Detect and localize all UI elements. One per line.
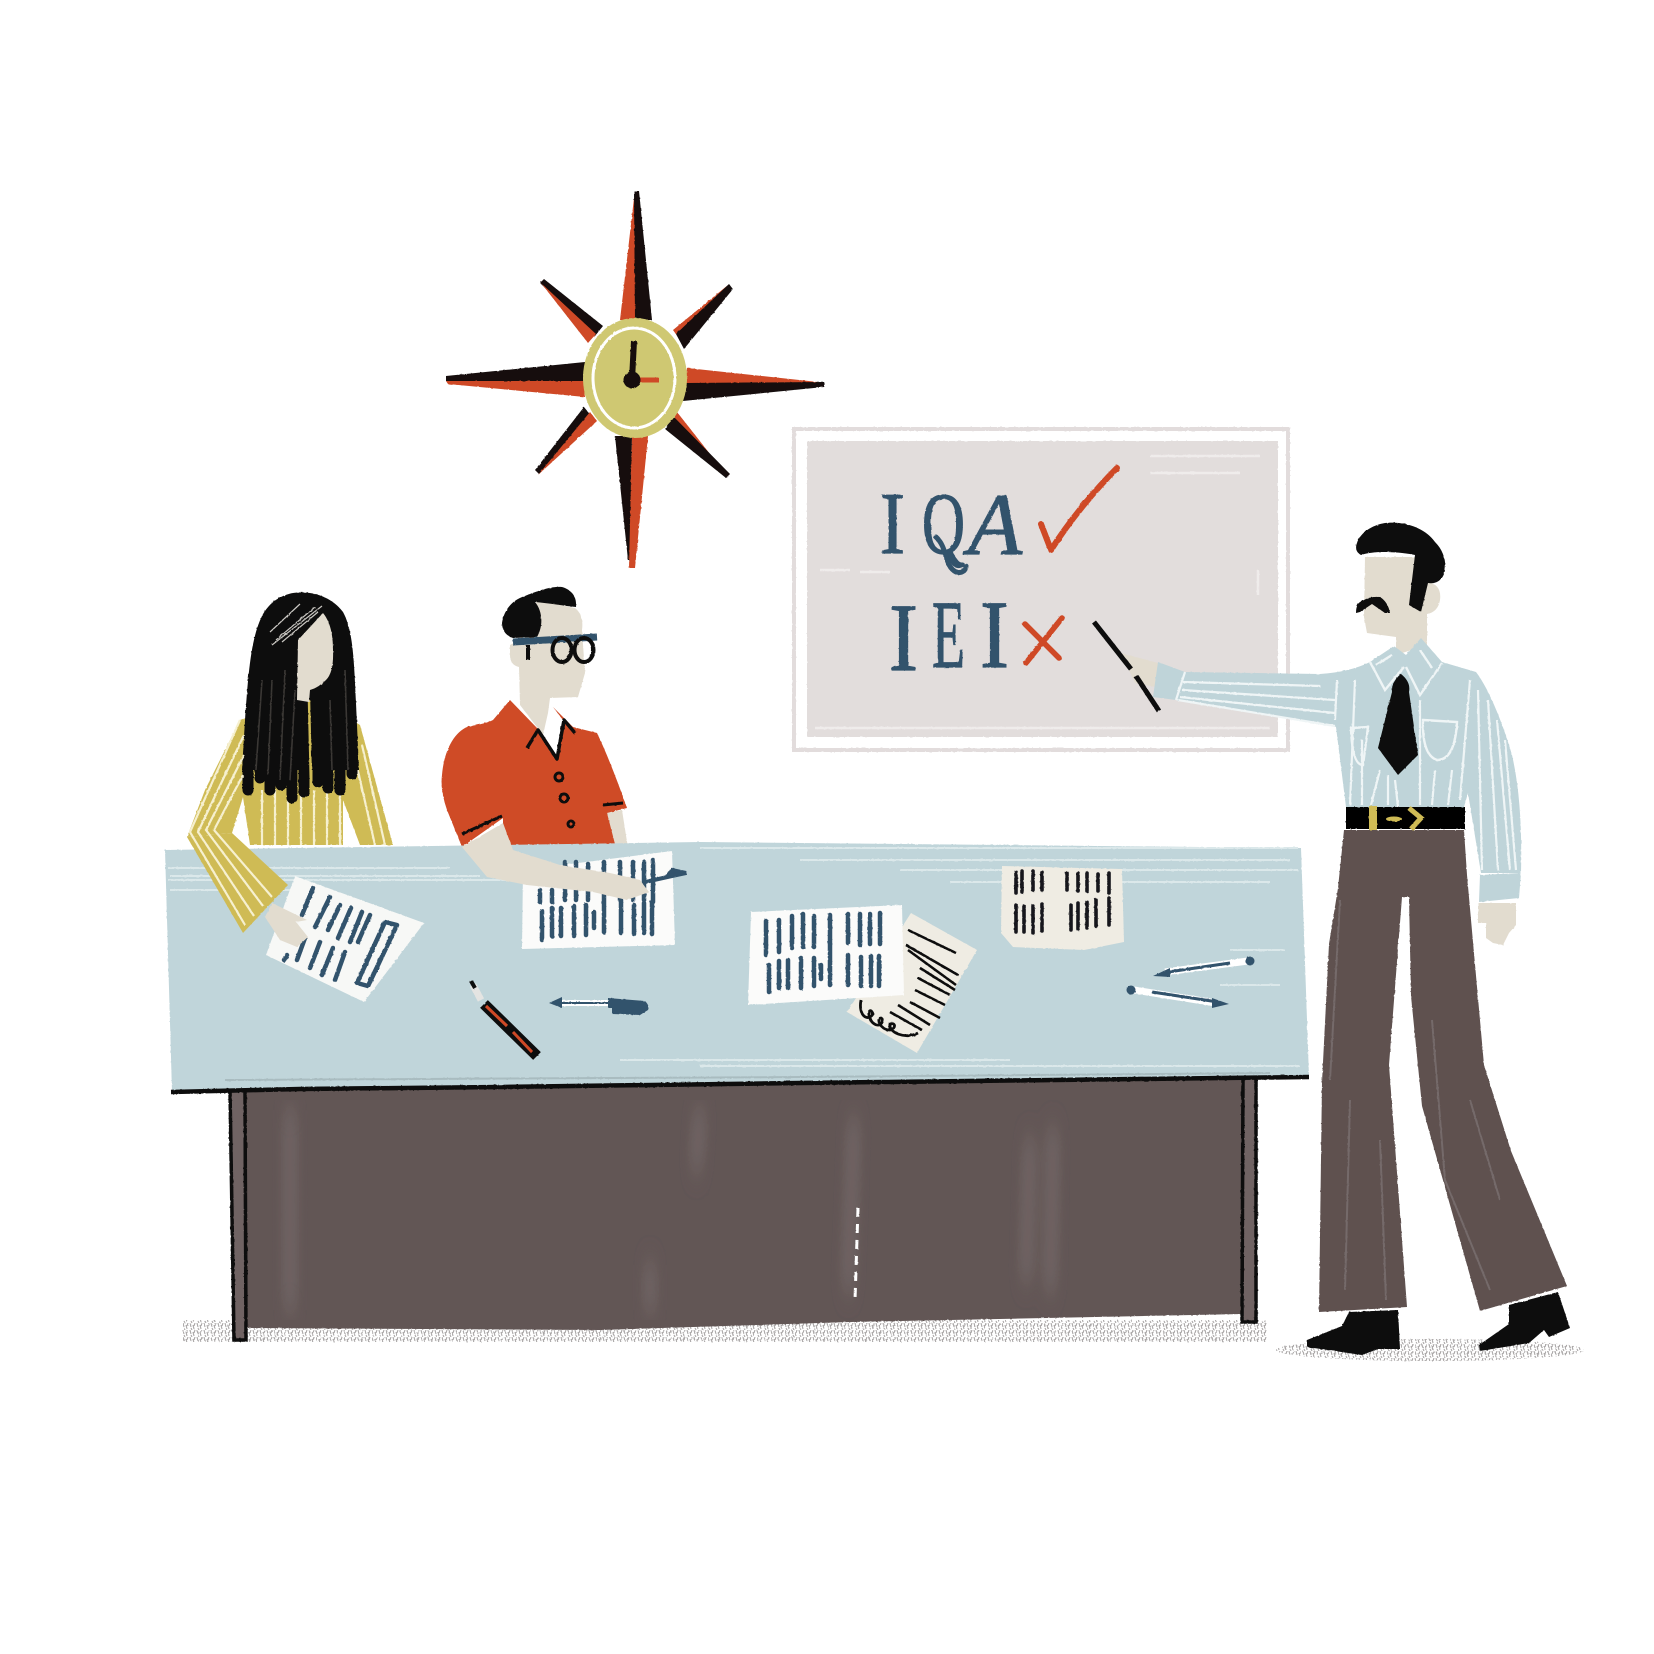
long black hair — [242, 592, 359, 770]
lower right pen — [1126, 986, 1229, 1008]
floor shadow under desk — [183, 1320, 1267, 1342]
text lines on paper — [284, 888, 370, 980]
trousers — [1319, 830, 1567, 1312]
scribbled lines — [890, 930, 958, 1030]
right sheet of paper — [1001, 866, 1124, 950]
gap in hair — [309, 700, 311, 788]
shirt collar line — [527, 720, 575, 759]
text lines — [766, 913, 880, 992]
table grey band — [225, 1073, 1270, 1080]
board text: IEI: I — [980, 581, 1009, 688]
shirt cuff — [1479, 873, 1521, 902]
pen in man's hand — [645, 870, 686, 882]
woman's forearm and hand — [187, 720, 308, 947]
neck and face — [510, 600, 585, 735]
sleeve cuffs — [462, 803, 623, 834]
necktie — [1378, 674, 1418, 775]
board text: IEI: E — [932, 581, 965, 688]
trouser highlights — [1330, 900, 1500, 1300]
board frame — [794, 429, 1288, 750]
table front edge — [171, 1077, 1309, 1092]
board text: IQA: Q — [922, 476, 965, 573]
neck, face and ear — [1364, 557, 1440, 655]
red cross — [1025, 618, 1062, 663]
hair strand highlights — [256, 670, 348, 780]
signature loops — [860, 1000, 918, 1036]
pen on table — [549, 997, 649, 1015]
board surface — [807, 441, 1278, 737]
shirt pockets — [1351, 720, 1457, 765]
red shirt — [442, 700, 627, 848]
paper in front of man with glasses — [522, 851, 675, 949]
right desk leg — [1242, 1078, 1256, 1322]
text lines — [1016, 871, 1109, 933]
sleeve stripes — [190, 720, 272, 925]
table brush marks — [168, 848, 1300, 1066]
glasses — [513, 637, 597, 662]
sweater torso and sleeve — [187, 698, 393, 845]
moustache — [1356, 597, 1390, 613]
board text: IQA: I — [880, 476, 905, 573]
far arm — [607, 810, 628, 848]
presenter — [1094, 523, 1570, 1355]
text lines — [540, 860, 653, 940]
red check mark — [1041, 468, 1117, 550]
presenter's hair — [1356, 523, 1445, 612]
woman's face — [297, 613, 333, 702]
woman in yellow sweater (upper body) — [187, 592, 393, 845]
large rounded bar — [357, 922, 397, 986]
back sheet with scribbles — [847, 913, 977, 1053]
pencil on table — [471, 981, 537, 1056]
belt — [1346, 807, 1465, 829]
shirt — [1153, 638, 1521, 873]
shirt collar outline — [1370, 650, 1442, 695]
board text: IQA: A — [963, 477, 1023, 574]
desk white specks — [855, 1208, 858, 1300]
clock face — [583, 318, 687, 438]
desk front — [243, 1076, 1243, 1330]
right boot — [1479, 1292, 1570, 1351]
pointing hand — [1121, 653, 1158, 687]
pointer stick — [1094, 622, 1159, 711]
left boot — [1307, 1310, 1400, 1355]
hanging hand — [1478, 903, 1516, 945]
shirt buttons — [555, 773, 574, 827]
presenter floor shadow — [1276, 1339, 1584, 1361]
wall clock — [446, 191, 824, 568]
clock inner ring — [593, 328, 675, 428]
man with glasses (upper body) — [442, 587, 628, 848]
sweater stripes — [262, 710, 385, 845]
belt buckle — [1369, 806, 1421, 830]
centre sheet of paper — [748, 905, 904, 1005]
board text: IEI — [889, 581, 1009, 691]
board brush marks — [815, 456, 1270, 728]
hair fringe highlights — [270, 604, 322, 645]
board text: IQA — [880, 476, 1023, 574]
table top — [165, 842, 1309, 1092]
clock rays — [446, 191, 824, 568]
shirt stripes — [1176, 672, 1516, 870]
paper under woman's hand — [266, 876, 424, 1002]
hair strand ends — [248, 760, 352, 798]
board text: IEI: I — [889, 584, 918, 691]
whiteboard — [794, 429, 1288, 750]
woman's hand — [265, 903, 308, 947]
desk brush marks — [290, 1110, 1053, 1310]
upper right pen — [1153, 956, 1254, 977]
left desk leg — [230, 1090, 246, 1340]
short black hair — [502, 587, 576, 638]
arm of man with glasses — [462, 823, 649, 900]
clock hands — [624, 341, 659, 388]
